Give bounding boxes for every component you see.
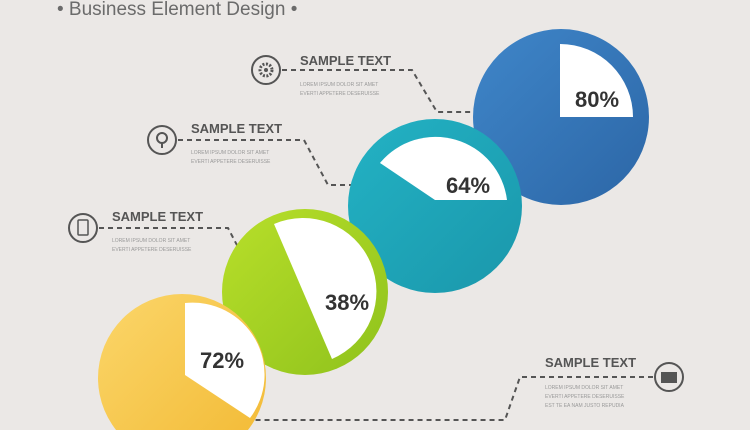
label 4: LOREM IPSUM DOLOR SIT AMET <box>545 385 623 391</box>
pie: green 38% <box>222 209 388 375</box>
label 2: SAMPLE TEXT <box>191 121 282 136</box>
label 1 <box>252 53 391 97</box>
label 1: LOREM IPSUM DOLOR SIT AMET <box>300 82 378 88</box>
icon: tablet <box>69 214 97 242</box>
icon: gear <box>252 56 280 84</box>
icon: pin <box>148 126 176 154</box>
pie: yellow 72%: 72% <box>200 348 244 373</box>
pie: green 38%: 38% <box>325 290 369 315</box>
icon: folder <box>655 363 683 391</box>
label 4 <box>545 355 683 409</box>
connector lines <box>99 70 653 420</box>
pie: yellow 72% <box>98 294 266 430</box>
label 3: EVERTI APPETERE DESERUISSE <box>112 247 192 253</box>
label 3: LOREM IPSUM DOLOR SIT AMET <box>112 238 190 244</box>
label 4: SAMPLE TEXT <box>545 355 636 370</box>
label 1: EVERTI APPETERE DESERUISSE <box>300 91 380 97</box>
label 2: LOREM IPSUM DOLOR SIT AMET <box>191 150 269 156</box>
label 2 <box>148 121 282 165</box>
pie: teal 64% <box>348 119 522 293</box>
pie: blue 80% <box>473 29 649 205</box>
pie: blue 80%: 80% <box>575 87 619 112</box>
label 4: EST TE EA NAM JUSTO REPUDIA <box>545 403 625 409</box>
label 3 <box>69 209 203 253</box>
pie: teal 64%: 64% <box>446 173 490 198</box>
label 1: SAMPLE TEXT <box>300 53 391 68</box>
label 3: SAMPLE TEXT <box>112 209 203 224</box>
label 2: EVERTI APPETERE DESERUISSE <box>191 159 271 165</box>
label 4: EVERTI APPETERE DESERUISSE <box>545 394 625 400</box>
